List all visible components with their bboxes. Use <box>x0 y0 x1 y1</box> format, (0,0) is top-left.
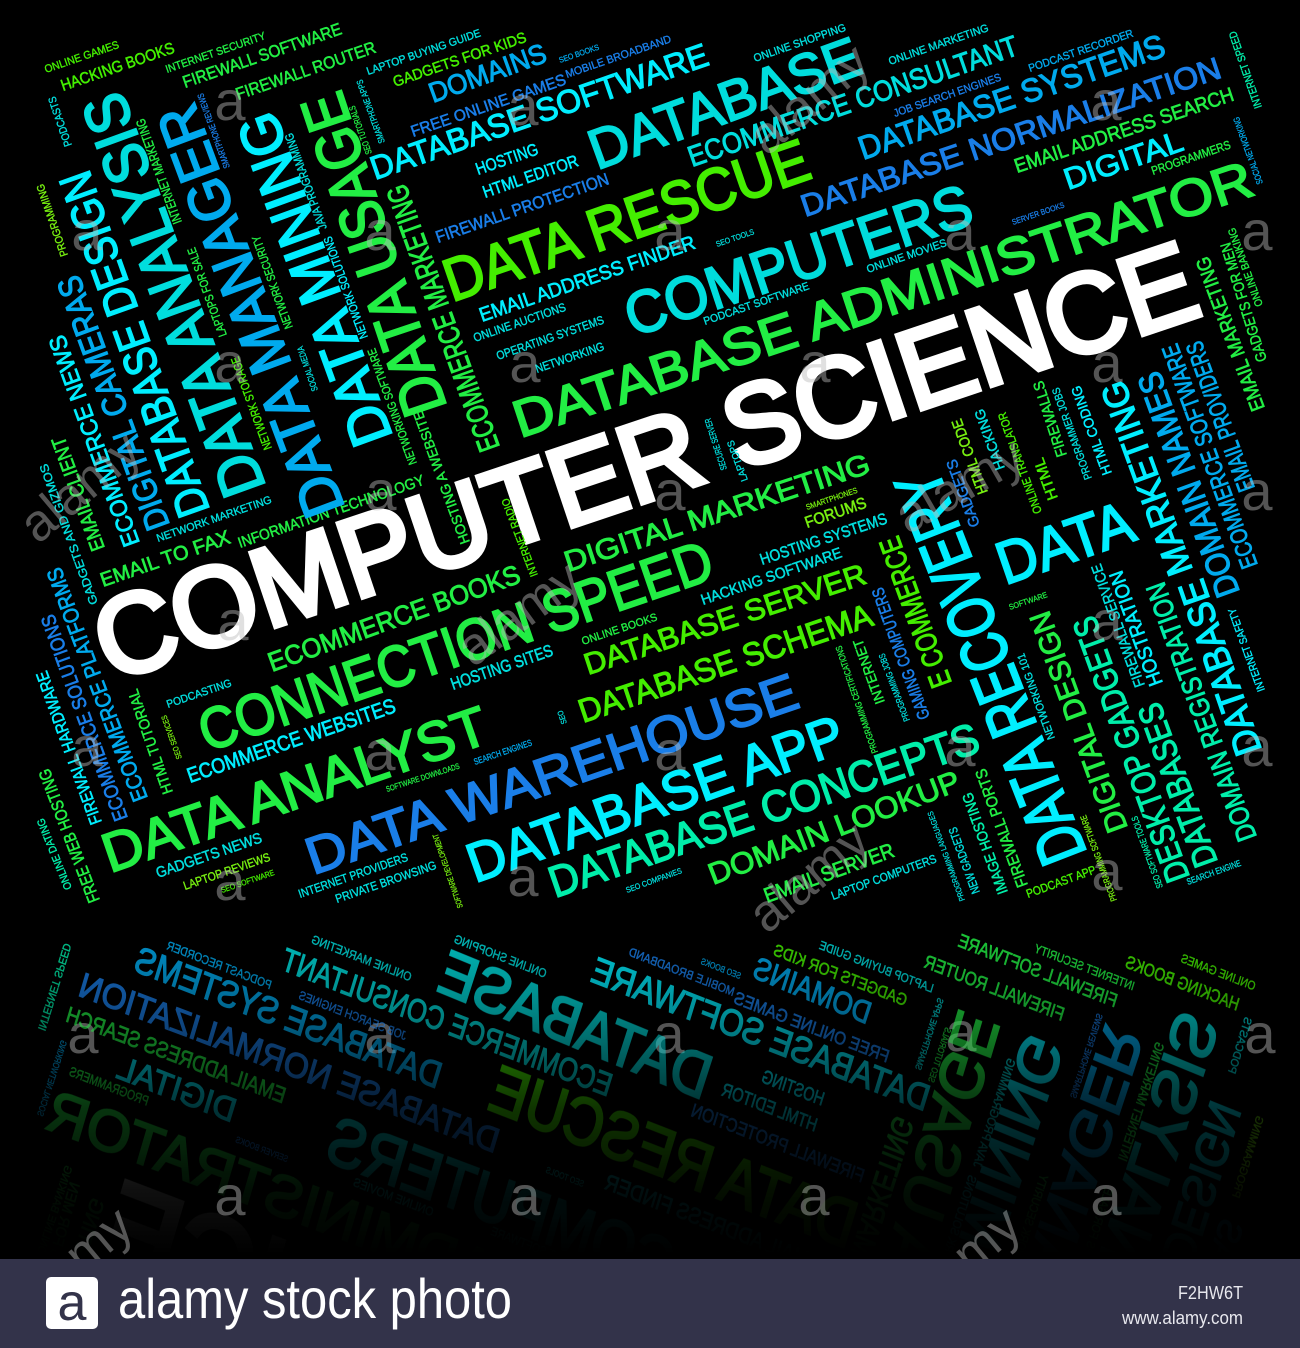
vertical small words: HTML CODING <box>1068 384 1115 477</box>
horizontal small words: EMAIL TO FAX <box>97 527 233 592</box>
horizontal small words: PODCASTING <box>165 677 233 711</box>
horizontal small words: DIGITAL MARKETING <box>560 448 874 579</box>
stock watermarks: a <box>507 845 539 908</box>
vertical small words: GAMING COMPUTERS <box>868 585 934 722</box>
horizontal small words: FIREWALL ROUTER <box>233 38 378 104</box>
stock watermarks: a <box>654 719 686 782</box>
stock watermarks: a <box>214 849 246 912</box>
vertical small words: GADGETS AND GIZMOS <box>37 462 101 607</box>
vertical small words: EMAIL MARKETING <box>1192 253 1270 414</box>
word: database app: DATABASE APP <box>458 703 852 894</box>
vertical small words: ECOMMERCE SOLUTIONS <box>37 611 133 824</box>
title: computer science: COMPUTER SCIENCE <box>78 218 1212 705</box>
horizontal small words: SEO COMPANIES <box>625 866 683 895</box>
stock watermarks: a <box>654 199 686 262</box>
horizontal small words: DATA <box>987 488 1143 597</box>
stock watermarks: a <box>365 459 397 522</box>
stock watermarks: a <box>509 1164 541 1227</box>
vertical small words: PROGRAMMER JOBS <box>1050 386 1095 481</box>
stock watermarks: alamy <box>8 421 152 554</box>
vertical small words: ONLINE DATING <box>35 816 75 891</box>
vertical small words: DESKTOP GADGETS <box>1066 611 1198 887</box>
horizontal small words: FIREWALL PROTECTION <box>433 170 611 247</box>
vertical small words: FREE WEB HOSTING <box>35 766 104 905</box>
mirrored reflection of word cloud <box>37 933 1264 1219</box>
horizontal small words: HOSTING SYSTEMS <box>758 511 889 569</box>
vertical small words: HTML TUTORIAL <box>125 687 177 796</box>
vertical small words: ECOMMERCE NEWS <box>44 331 146 550</box>
vertical small words <box>32 29 1271 909</box>
stock watermarks: alamy <box>0 1196 144 1329</box>
vertical small words: NETWORK STORAGE <box>228 355 275 452</box>
vertical small words: SOCIAL MEDIA <box>295 345 320 393</box>
horizontal small words: EMAIL ADDRESS FINDER <box>476 232 698 327</box>
website: www.alamy.com <box>1121 1308 1243 1328</box>
vertical small words: FIREWALLS <box>1030 379 1071 459</box>
horizontal small words: PROGRAMMERS <box>1149 138 1232 178</box>
word: data analyst: DATA ANALYST <box>94 694 496 884</box>
horizontal small words: SEO TOOLS <box>715 227 755 249</box>
vertical small words: INTERNET <box>849 637 888 706</box>
horizontal small words: DIGITAL <box>1060 125 1188 197</box>
vertical small words: EMAIL PROVIDERS <box>1181 337 1261 495</box>
horizontal small words: DOMAIN LOOKUP <box>704 765 965 892</box>
stock watermarks: a <box>653 1002 685 1065</box>
horizontal small words: HOSTING SITES <box>448 641 555 694</box>
word: data recovery: DATA RECOVERY <box>880 460 1100 875</box>
horizontal small words: DATABASE NORMALIZATION <box>796 51 1225 224</box>
image id: F2HW6T <box>1178 1283 1243 1303</box>
stock watermarks: a <box>1091 589 1123 652</box>
horizontal small words: FORUMS <box>803 495 869 532</box>
vertical small words: NETWORKING 101 <box>1015 651 1058 741</box>
word: database: DATABASE <box>580 25 869 181</box>
stock watermarks: a <box>1091 839 1123 902</box>
horizontal small words: ONLINE SHOPPING <box>752 22 848 65</box>
stock watermarks: a <box>944 715 976 778</box>
horizontal small words: FIREWALL SOFTWARE <box>180 19 344 92</box>
vertical small words: GADGETS <box>944 457 984 529</box>
horizontal small words: LAPTOP COMPUTERS <box>829 852 938 903</box>
vertical small words: PROGRAMMING SOFTWARE <box>1078 814 1119 903</box>
vertical small words: ECOMMERCE MARKETING <box>381 180 507 456</box>
footer bar <box>0 1259 1300 1348</box>
vertical small words: FIREWALL PORTS <box>973 766 1032 889</box>
stock watermarks: a <box>944 199 976 262</box>
stock watermarks: a <box>1241 199 1273 262</box>
horizontal small words: ONLINE BOOKS <box>580 612 659 648</box>
horizontal small words: ONLINE AUCTIONS <box>471 300 568 345</box>
word: database administrator: DATABASE ADMINISTRATOR <box>506 151 1261 449</box>
vertical small words: ECOMMERCE SOFTWARE <box>1157 340 1264 572</box>
horizontal small words: SOFTWARE <box>1008 590 1048 612</box>
vertical small words: ONLINE BANKING <box>1226 226 1266 308</box>
horizontal small words: JOB SEARCH ENGINES <box>892 72 1003 120</box>
stock watermarks: a <box>798 1164 830 1227</box>
vertical small words: SOCIAL NETWORKING <box>1231 116 1265 186</box>
horizontal small words: OPERATING SYSTEMS <box>494 313 606 363</box>
word: data warehouse: DATA WAREHOUSE <box>298 663 806 886</box>
word cloud <box>32 19 1271 909</box>
stock watermarks: a <box>507 74 539 137</box>
vertical small words: HTML CODE <box>949 416 992 496</box>
horizontal small words: SEARCH ENGINES <box>472 738 533 767</box>
horizontal small words: DOMAINS <box>424 37 551 109</box>
horizontal small words: EMAIL ADDRESS SEARCH <box>1012 84 1237 178</box>
stock watermarks: a <box>214 1164 246 1227</box>
vertical small words: PROGRAMMING LANGUAGES <box>926 810 967 902</box>
stock watermarks: a <box>214 69 246 132</box>
vertical small words: SMARTPHONE REVIEWS <box>195 92 232 170</box>
horizontal small words: DATABASE SYSTEMS <box>853 27 1170 167</box>
vertical small words: PROGRAMMING <box>35 182 71 258</box>
horizontal small words: HACKING BOOKS <box>59 40 177 95</box>
horizontal small words: FREE ONLINE GAMES <box>409 72 568 141</box>
horizontal small words: SEO <box>556 709 569 725</box>
vertical small words: SMARTPHONE APPS <box>355 78 387 145</box>
horizontal small words: EMAIL SERVER <box>761 839 897 908</box>
vertical small words: DOMAIN REGISTRATION <box>1140 578 1263 846</box>
stock watermarks: a <box>67 1002 99 1065</box>
stock watermarks: alamy <box>446 549 592 678</box>
horizontal small words: SOFTWARE DOWNLOADS <box>385 762 461 794</box>
horizontal small words: INFORMATION TECHNOLOGY <box>236 472 427 552</box>
stock watermarks: a <box>71 715 103 778</box>
horizontal small words: ECOMMERCE WEBSITES <box>184 695 399 788</box>
word: database design: DATABASE DESIGN <box>49 165 219 524</box>
vertical small words: HTML <box>1031 455 1062 502</box>
horizontal small words: INTERNET PROVIDERS <box>296 850 410 901</box>
horizontal small words: DATABASE SOFTWARE <box>365 36 713 187</box>
horizontal small words: HOSTING <box>473 140 541 179</box>
vertical small words: SEO SOFTWARE TOOLS <box>1129 815 1165 890</box>
horizontal small words: ONLINE MARKETING <box>887 22 990 68</box>
vertical small words: EMAIL CLIENT <box>48 434 110 554</box>
stock watermarks: a <box>799 331 831 394</box>
horizontal small words: INTERNET SECURITY <box>164 30 268 76</box>
vertical small words: NETWORKING SOFTWARE <box>365 346 420 467</box>
word: data rescue: DATA RESCUE <box>434 126 818 314</box>
horizontal small words: SEO BOOKS <box>558 43 600 65</box>
word: data manager: DATA MANAGER <box>145 96 357 526</box>
stock watermarks: a <box>945 1000 977 1063</box>
horizontal small words <box>43 19 1242 908</box>
stock watermarks: a <box>217 589 249 652</box>
vertical small words: JAVA PROGRAMMING <box>282 131 330 232</box>
vertical small words: LAPTOPS FOR SALE <box>185 246 230 339</box>
vertical small words: INTERNET SAFETY <box>1226 606 1268 693</box>
word: data analysis: DATA ANALYSIS <box>69 84 279 506</box>
stock watermarks: a <box>214 331 246 394</box>
horizontal small words: SEARCH ENGINE <box>1185 858 1242 887</box>
stock watermarks: a <box>1091 331 1123 394</box>
word: database concepts: DATABASE CONCEPTS <box>542 714 986 907</box>
horizontal small words: DATABASE SCHEMA <box>573 596 877 730</box>
stock watermarks: alamy <box>885 426 1034 545</box>
vertical small words: MARKETING <box>1092 376 1201 581</box>
stock watermarks: a <box>364 719 396 782</box>
vertical small words: HOSTRATION <box>1106 568 1168 689</box>
horizontal small words: PRIVATE BROWSING <box>333 858 438 906</box>
vertical small words: SEO TUTORIALS <box>347 104 374 156</box>
horizontal small words: NETWORKING <box>533 339 606 376</box>
vertical small words: INTERNET SPEED <box>1227 29 1265 110</box>
vertical small words: DATABASE <box>1171 574 1271 761</box>
stock watermarks: a <box>71 199 103 262</box>
vertical small words: GADGETS FOR MEN <box>1218 240 1271 364</box>
horizontal small words: ONLINE MOVIES <box>865 237 948 276</box>
horizontal small words: HTML EDITOR <box>480 151 581 202</box>
stock watermarks: a <box>364 1002 396 1065</box>
stock watermarks: a <box>1241 715 1273 778</box>
brand name: alamy stock photo <box>118 1267 512 1330</box>
horizontal small words: DATABASE SERVER <box>580 558 870 682</box>
icon: alamy logo: a <box>58 1274 87 1332</box>
horizontal small words: MOBILE BROADBAND <box>564 33 673 81</box>
horizontal small words: SMARTPHONES <box>805 486 859 512</box>
vertical small words: NEW GADGETS <box>946 825 983 896</box>
stock watermarks: alamy <box>737 811 881 944</box>
horizontal small words: ECOMMERCE BOOKS <box>264 559 524 678</box>
stock watermarks: alamy <box>888 1196 1032 1329</box>
vertical small words: ONLINE TRANSLATOR <box>995 410 1045 516</box>
vertical small words: PODCASTS <box>47 95 75 148</box>
vertical small words: LAPTOPS <box>726 438 751 483</box>
vertical small words: NETWORK SECURITY <box>249 234 296 331</box>
stock watermarks: a <box>1241 459 1273 522</box>
stock watermarks: a <box>1244 1002 1276 1065</box>
stock watermarks: alamy <box>737 33 881 166</box>
stock watermarks: a <box>1090 1164 1122 1227</box>
vertical small words: SEO SERVICES <box>160 714 184 760</box>
horizontal small words: LAPTOP BUYING GUIDE <box>365 27 482 78</box>
horizontal small words: LAPTOP REVIEWS <box>181 850 272 893</box>
vertical small words: HOSTING A WEBSITE <box>410 408 473 546</box>
word: data usage: DATA USAGE <box>288 84 460 424</box>
horizontal small words: GADGETS FOR KIDS <box>391 29 529 91</box>
horizontal small words: PODCAST SOFTWARE <box>702 280 811 328</box>
icon: alamy logo <box>46 1274 98 1332</box>
vertical small words: DIGITAL DESIGN <box>1024 607 1135 837</box>
horizontal small words: NETWORK MARKETING <box>155 494 273 545</box>
vertical small words: IMAGE HOSTING <box>959 790 1012 896</box>
stock watermarks: a <box>364 199 396 262</box>
horizontal small words: GADGETS NEWS <box>154 830 264 882</box>
vertical small words: ECOMMERCE PLATFORMS <box>42 564 153 805</box>
vertical small words: INTERNET RADIO <box>500 496 541 578</box>
vertical small words: PROGRAMMING CERTIFICATIONS <box>834 645 880 755</box>
vertical small words: PROGRAMMING JOBS <box>877 652 912 723</box>
vertical small words: NETWORK SOLUTIONS <box>321 234 371 341</box>
vertical small words: FIREWALL HARDWARE <box>32 668 106 827</box>
horizontal small words: PODCAST RECORDER <box>1027 28 1135 75</box>
word: connection speed: CONNECTION SPEED <box>190 528 721 764</box>
word: computers: COMPUTERS <box>616 171 981 349</box>
vertical small words: DIGITAL CAMERAS <box>50 270 178 535</box>
vertical small words: SOFTWARE DEVELOPMENT <box>431 833 465 909</box>
stock watermarks: a <box>509 331 541 394</box>
vertical small words: INTERNET MARKETING <box>133 117 185 226</box>
horizontal small words: ECOMMERCE CONSULTANT <box>684 30 1023 174</box>
vertical small words: DATABASES <box>1131 698 1226 872</box>
horizontal small words: HACKING SOFTWARE <box>699 545 844 609</box>
horizontal small words: PODCAST APP <box>1024 863 1098 901</box>
vertical small words: HACKING <box>971 407 1008 472</box>
horizontal small words: SEO SOFTWARE <box>220 868 276 895</box>
vertical small words: E COMMERCE <box>874 532 959 692</box>
vertical small words: FIREWALL SERVICE <box>1088 561 1149 689</box>
word: data mining: DATA MINING <box>224 104 405 455</box>
vertical small words: SECURE SERVER <box>703 417 729 471</box>
horizontal small words: ONLINE GAMES <box>43 39 121 76</box>
stock watermarks: a <box>654 459 686 522</box>
stock watermarks: a <box>1090 69 1122 132</box>
horizontal small words: SERVER BOOKS <box>1011 200 1066 227</box>
vertical small words: DOMAIN NAMES <box>1131 367 1248 602</box>
